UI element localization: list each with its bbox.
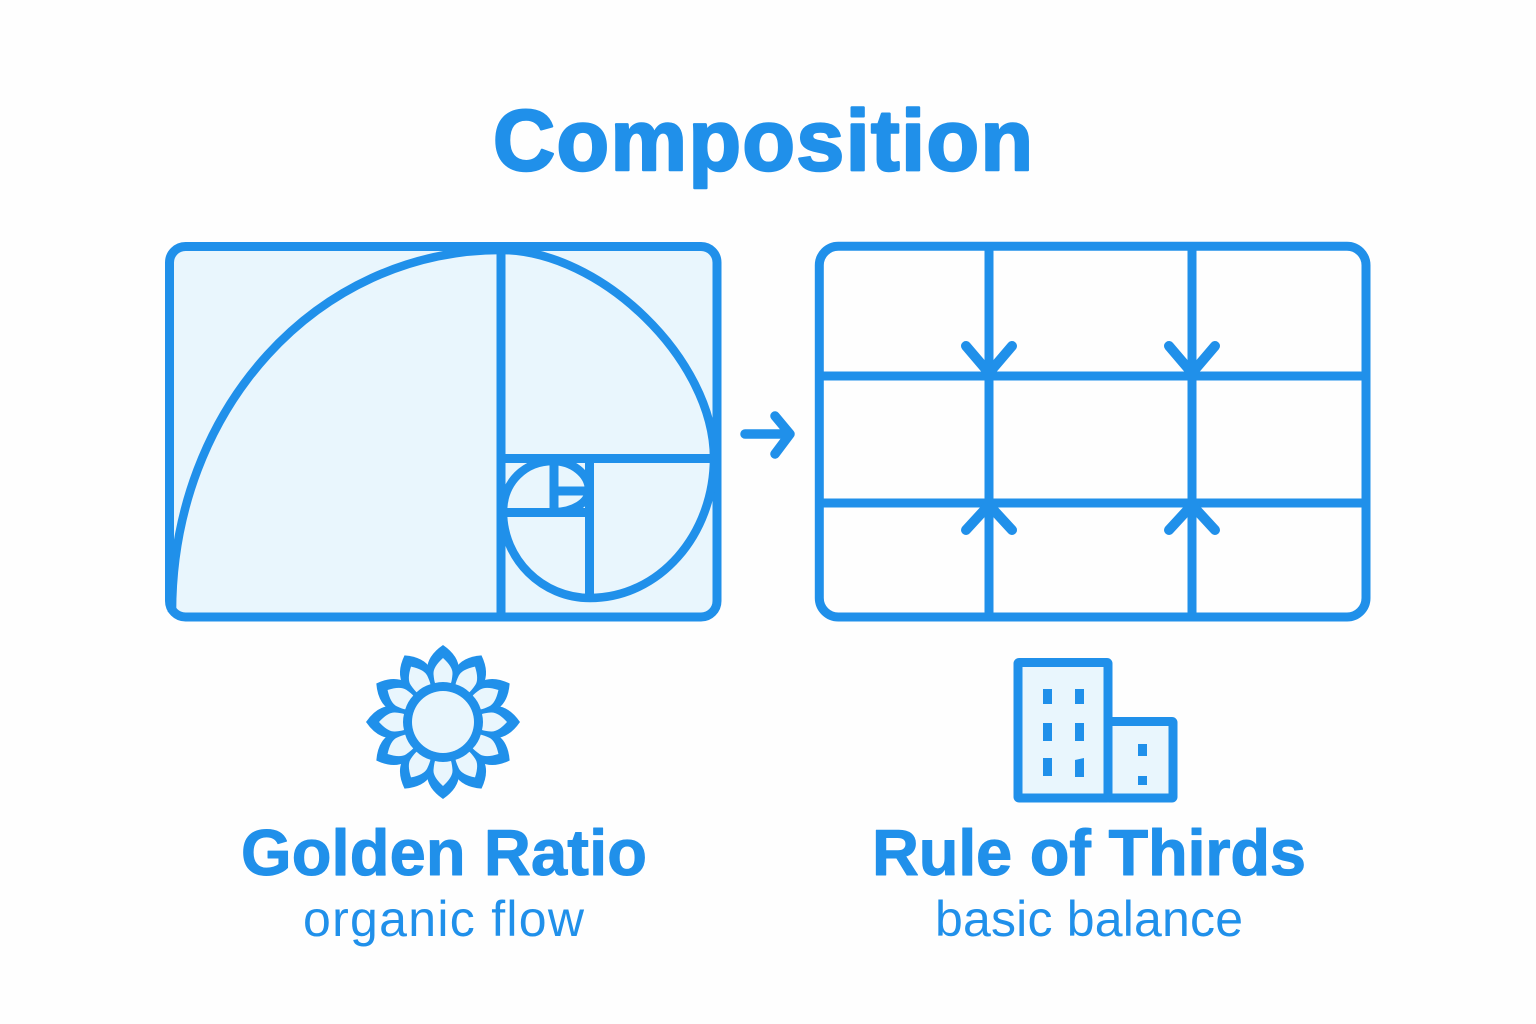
text: basic balance: basic balance bbox=[935, 891, 1243, 947]
panel: rule of thirds grid bbox=[819, 246, 1366, 617]
icon: sunflower bbox=[366, 645, 520, 799]
power point arrows bbox=[966, 346, 1215, 530]
title: Composition bbox=[493, 93, 1033, 189]
golden section dividers bbox=[501, 246, 717, 617]
petal fills bbox=[379, 658, 507, 786]
icon: buildings bbox=[1018, 662, 1173, 798]
grid frame bbox=[819, 246, 1366, 617]
tall building bbox=[1018, 662, 1108, 798]
golden spiral bbox=[172, 250, 714, 612]
panel background and frame bbox=[170, 246, 717, 617]
heading: golden ratio: Golden Ratio bbox=[241, 816, 647, 889]
windows bbox=[1043, 689, 1147, 785]
flower centre bbox=[412, 691, 474, 753]
grid lines bbox=[819, 246, 1366, 617]
panel: golden ratio spiral bbox=[170, 246, 717, 617]
arrow: golden ratio to rule of thirds bbox=[745, 416, 790, 454]
heading: rule of thirds: Rule of Thirds bbox=[872, 816, 1306, 889]
petal outlines bbox=[366, 645, 520, 799]
text: organic flow: organic flow bbox=[303, 891, 585, 947]
small building bbox=[1108, 722, 1173, 798]
